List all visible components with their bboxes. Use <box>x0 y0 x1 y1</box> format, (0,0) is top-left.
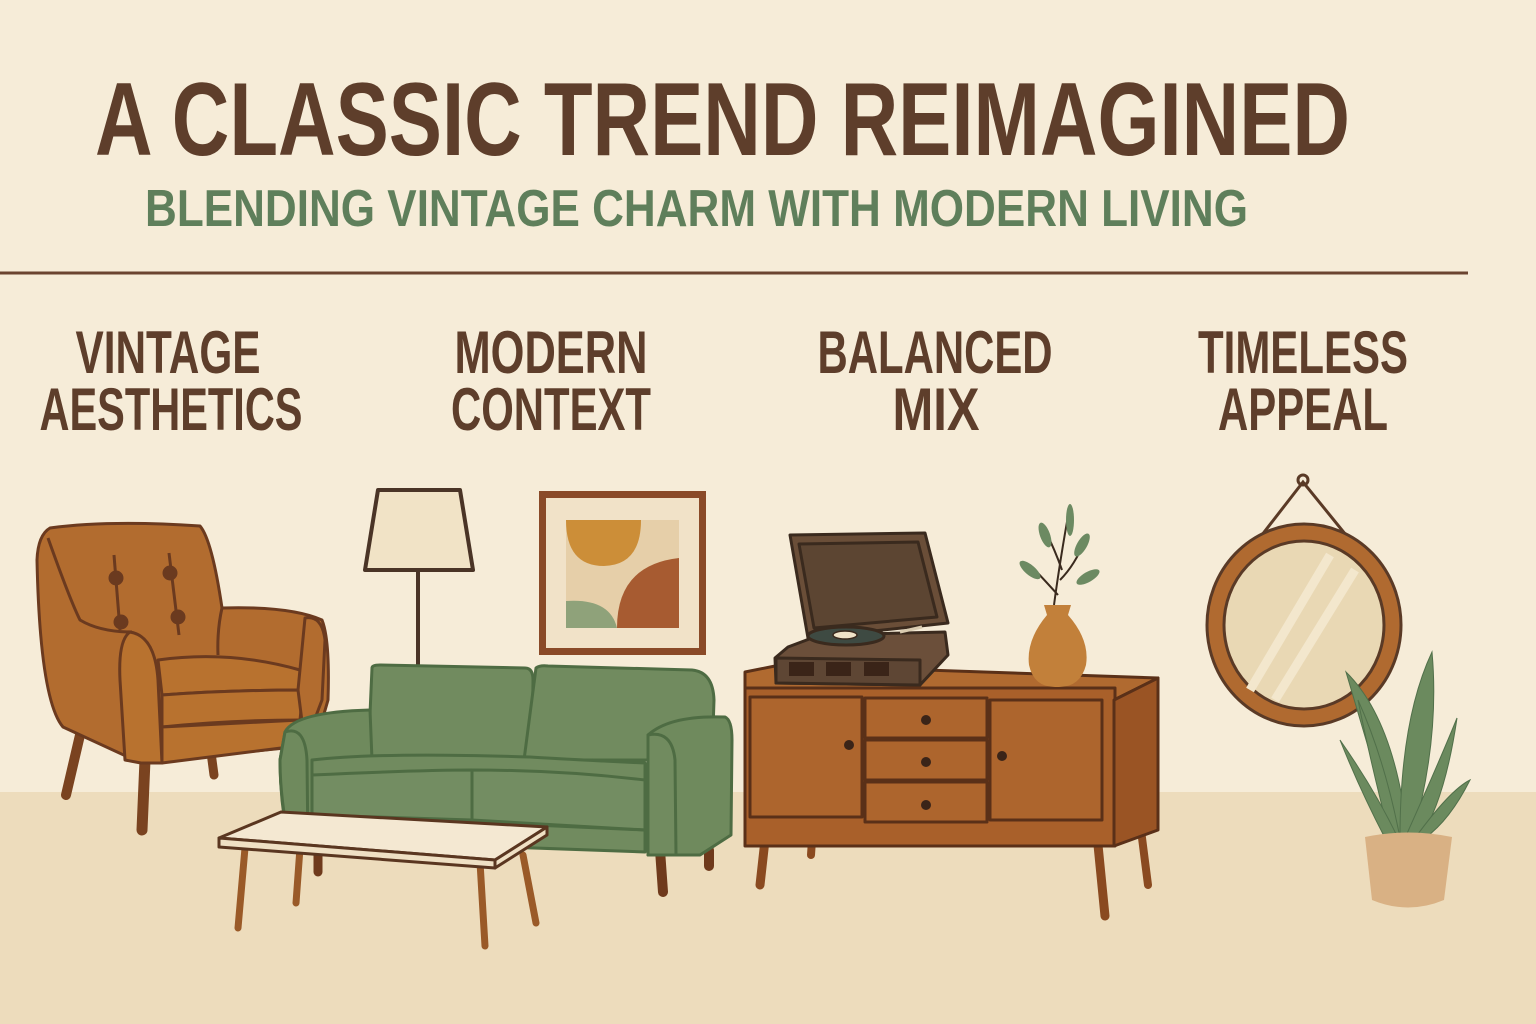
icon: green sofa <box>280 665 732 892</box>
heading: vintage aesthetics <box>40 319 302 443</box>
icon: coffee table <box>219 812 547 946</box>
icon: framed art <box>539 491 706 655</box>
heading: balanced mix: MIX <box>892 376 980 443</box>
heading: modern context <box>451 319 651 443</box>
icon: sideboard <box>745 665 1158 916</box>
icon: vase with branch <box>1017 504 1102 687</box>
heading: timeless appeal: TIMELESS <box>1198 319 1408 386</box>
icon: floor lamp <box>365 490 473 668</box>
icon: snake plant <box>1340 652 1470 908</box>
subtitle: BLENDING VINTAGE CHARM WITH MODERN LIVING <box>145 180 1248 238</box>
icon: armchair <box>37 523 328 830</box>
heading: modern context: CONTEXT <box>451 376 651 443</box>
icon: record player <box>775 533 948 685</box>
heading: modern context: MODERN <box>454 319 648 386</box>
heading: vintage aesthetics: AESTHETICS <box>40 376 302 443</box>
heading: balanced mix: BALANCED <box>818 319 1052 386</box>
heading: timeless appeal <box>1198 319 1408 443</box>
icon: round mirror <box>1207 475 1401 726</box>
heading: timeless appeal: APPEAL <box>1218 376 1388 443</box>
heading: balanced mix <box>818 319 1052 443</box>
heading: vintage aesthetics: VINTAGE <box>76 319 260 386</box>
